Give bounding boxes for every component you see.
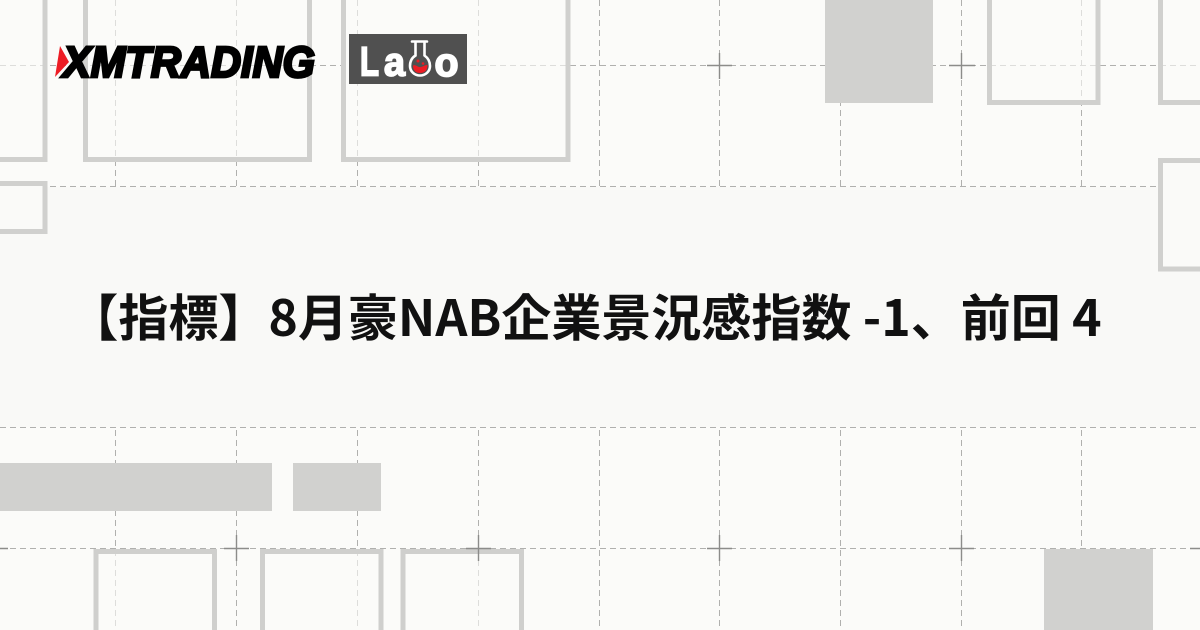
- logo: XMTRADING: [55, 38, 315, 87]
- title: 【指標】8月豪NAB企業景況感指数 -1、前回 4: [68, 279, 1102, 351]
- outlined squares: bottom row: [96, 552, 522, 630]
- outlined squares: side row: [0, 160, 1200, 269]
- icon: flask: [410, 42, 430, 76]
- logo: Labo: [349, 34, 467, 85]
- grey block: bottom right: [1044, 549, 1153, 630]
- icon: red triangle: [55, 46, 69, 77]
- outlined squares: top row: [0, 0, 1200, 160]
- grey bar: lower left short: [293, 463, 381, 511]
- central title panel: [0, 187, 1200, 427]
- logo background: [349, 34, 467, 84]
- XMTRADING wordmark: XMTRADING: [60, 38, 315, 87]
- grey bar: lower left long: [0, 463, 272, 511]
- letter: o: o: [434, 41, 458, 85]
- grey block: top right: [825, 0, 933, 103]
- letter: L: L: [360, 38, 379, 84]
- letter: a: a: [384, 40, 406, 84]
